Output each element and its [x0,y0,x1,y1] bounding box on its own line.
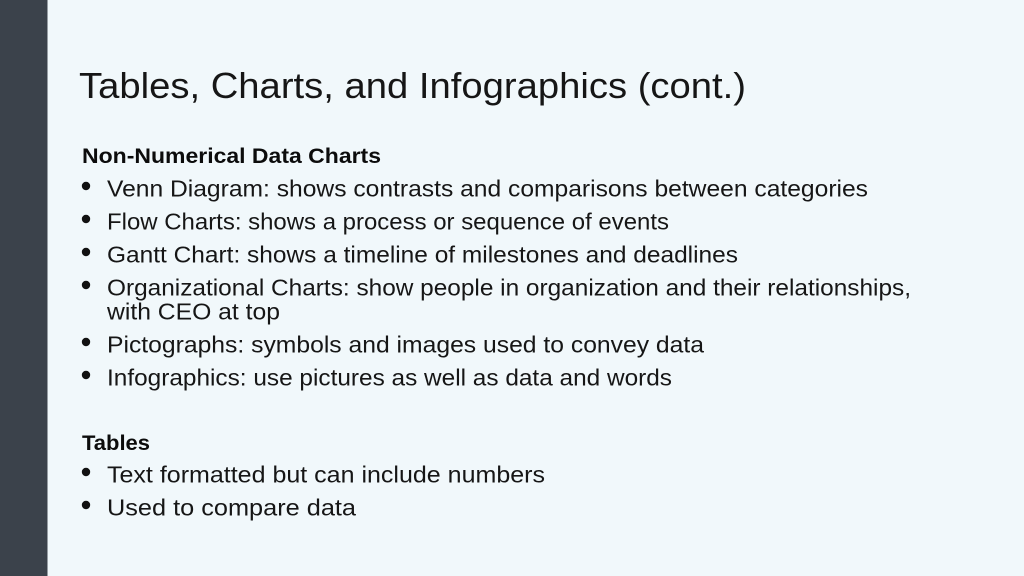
bullet: organizational charts [82,274,911,324]
bullet: used to compare: Used to compare data [107,494,356,520]
bullet: venn diagram: Venn Diagram: shows contrasts and comparisons between categories [107,176,868,202]
text block: non-numerical data charts [82,145,911,390]
bullet: infographics: Infographics: use pictures as well as data and words [107,364,672,390]
bullet: pictographs: Pictographs: symbols and images used to convey data [107,332,704,358]
left sidebar [0,0,48,576]
bullet: text formatted: Text formatted but can include numbers [107,462,545,488]
text block: tables [82,432,545,520]
title: Tables, Charts, and Infographics (cont.) [79,65,746,106]
heading: tables: Tables [82,432,150,455]
bullet: organizational charts: Organizational Charts: show people in organization and their relationships, [107,274,911,300]
heading: non-numerical data charts: Non-Numerical Data Charts [82,145,381,168]
bullet: flow charts: Flow Charts: shows a process or sequence of events [107,208,669,234]
bullet: organizational charts: with CEO at top [106,298,280,324]
bullet: gantt chart: Gantt Chart: shows a timeline of milestones and deadlines [107,242,738,268]
